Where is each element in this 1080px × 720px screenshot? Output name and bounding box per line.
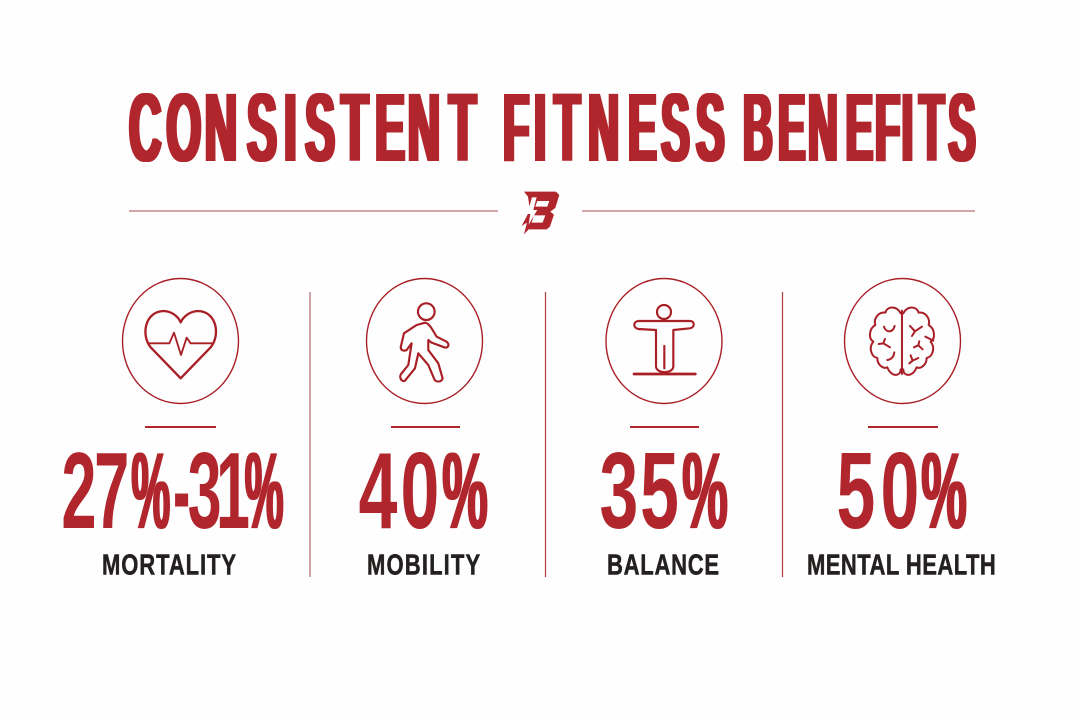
icon: walking person: [366, 278, 482, 404]
icon: balancing figure: [606, 278, 722, 404]
panel: mental health: [807, 278, 996, 581]
stat: 40%: [359, 430, 488, 552]
label: mental health: MENTAL HEALTH: [807, 550, 996, 581]
accent bar: [630, 426, 699, 428]
label: mobility: MOBILITY: [367, 550, 480, 581]
stat: 50%: %: [921, 431, 967, 552]
icon: lightning B logo: [522, 192, 559, 234]
stat: 40%: 40: [359, 430, 439, 552]
title: BENEFITS: [743, 72, 976, 182]
title: [129, 72, 976, 183]
stat: 35%: %: [682, 431, 728, 552]
stat: 35%: 35: [599, 430, 679, 552]
panel: mortality: [61, 278, 283, 581]
icon: brain: [844, 278, 960, 404]
accent bar: [145, 426, 216, 428]
stat: 35%: [599, 430, 728, 552]
stat: 27%-31%: 31: [188, 429, 250, 551]
stat: 27%-31%: %: [245, 430, 283, 552]
title: FITNESS: [503, 73, 725, 182]
stat: 50%: 50: [836, 430, 919, 552]
label: balance: BALANCE: [607, 550, 719, 581]
panel: balance: [599, 278, 728, 581]
accent bar: [868, 426, 938, 428]
stat: 27%-31%: %-: [131, 430, 189, 552]
stat: 40%: %: [442, 431, 488, 552]
stat: 50%: [836, 430, 967, 552]
stat: 27%-31%: [61, 429, 283, 552]
icon: heart with pulse: [122, 278, 238, 404]
title: CONSISTENT: [129, 74, 476, 183]
panel: mobility: [359, 278, 488, 581]
accent bar: [391, 426, 460, 428]
stat: 27%-31%: 27: [61, 429, 129, 551]
label: mortality: MORTALITY: [102, 550, 236, 581]
